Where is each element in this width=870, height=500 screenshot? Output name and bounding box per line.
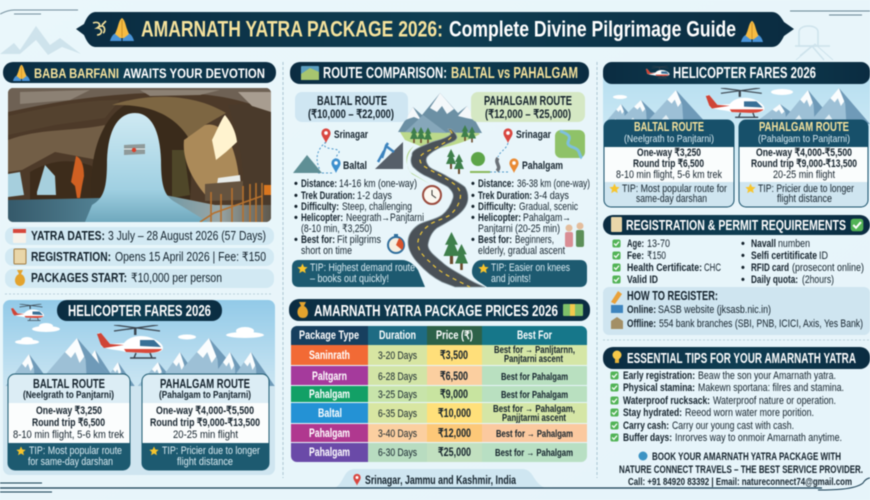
info: registration: REGISTRATION: <box>31 250 111 264</box>
list: baltal details: Distance: <box>301 178 337 190</box>
lingam <box>85 113 208 222</box>
panel: helicopter fares right <box>603 62 870 210</box>
list: baltal details: 14-16 km (one-way) <box>339 178 417 190</box>
icon: small helicopter <box>11 304 44 320</box>
info: registration: Opens 15 April 2026 | Fee: ₹150 <box>115 250 266 264</box>
card: baltal route: TIP: Most popular route <box>29 445 122 457</box>
list: requirements: numben <box>778 238 810 250</box>
icon: helicopter <box>706 88 764 117</box>
card: baltal: One-way ₹3,250 <box>637 147 701 159</box>
label: baltal route <box>295 92 408 122</box>
list: baltal details: • <box>294 212 298 224</box>
card: pahalgam route: flight distance <box>177 456 233 468</box>
list: baltal details: Steep, challenging <box>342 201 412 213</box>
list: baltal details: Fit pilgrims <box>337 234 381 246</box>
table text: 6-28 Days <box>378 371 417 383</box>
tip: baltal <box>292 260 425 287</box>
card: baltal route: for same-day darshan <box>28 456 113 468</box>
table text: Paltgarn <box>312 371 347 383</box>
list: requirements: • <box>741 274 745 286</box>
box: how to register: HOW TO REGISTER: <box>627 289 718 303</box>
tip: pahalgam: TIP: Easier on knees <box>491 262 570 274</box>
list: requirements: Age: <box>627 238 644 250</box>
list: tips: Physical stamina: <box>623 382 695 394</box>
heading: route comparison <box>290 62 589 84</box>
label: pahalgam route: PAHALGAM ROUTE <box>484 94 572 108</box>
icon: clock <box>423 186 441 204</box>
list: baltal details <box>294 178 424 257</box>
tip: baltal: – books out quickly! <box>310 273 389 285</box>
table text: Duration <box>379 330 416 342</box>
info: yatra dates <box>5 227 274 245</box>
list: baltal details: Helicopter: <box>301 212 343 224</box>
heading: package prices <box>289 299 590 321</box>
list: tips <box>610 370 844 444</box>
list: requirements: Navall <box>751 238 776 250</box>
list: pahalgam details: 3-4 days <box>534 190 569 202</box>
road <box>408 129 485 287</box>
icon: praying hands left <box>110 18 134 41</box>
list: baltal details: 1-2 days <box>357 190 392 202</box>
list: baltal details: • <box>294 201 298 213</box>
list: pahalgam details: • <box>471 234 475 246</box>
list: pahalgam details: Gradual, scenic <box>519 201 578 213</box>
list: pahalgam details: Pahalgam→ <box>523 212 571 224</box>
list: tips: Carry cash: <box>623 420 669 432</box>
card: baltal: Round trip ₹6,500 <box>633 158 704 170</box>
list: tips: Buffer days: <box>623 432 672 444</box>
table text <box>299 330 575 459</box>
icon: om <box>93 21 106 35</box>
icon: climber <box>375 142 403 169</box>
trees beside road <box>444 149 468 270</box>
panel: baba barfani <box>3 62 276 288</box>
list: requirements: • <box>741 250 745 262</box>
card: baltal: (Neelgrath to Panjtarni) <box>624 133 714 145</box>
list: baltal details: • <box>294 178 298 190</box>
list: pahalgam details: Best for: <box>478 234 512 246</box>
list: pahalgam details <box>471 178 590 257</box>
list: pahalgam details: Beginners, <box>515 234 554 246</box>
map: pahalgam: Srinagar <box>516 129 552 141</box>
heading: helicopter fares <box>57 300 222 321</box>
list: baltal details: Trek Duration: <box>301 190 355 202</box>
fence <box>200 183 262 222</box>
list: tips: Waterproof rucksack: <box>623 395 710 407</box>
tip: baltal: TIP: Highest demand route <box>310 262 415 274</box>
map: baltal: Baltal <box>343 160 367 172</box>
table text: 6-35 Days <box>378 408 417 420</box>
list: tips: Stay hydrated: <box>623 407 682 419</box>
table text: Best for → Pahalgam <box>495 447 573 459</box>
title banner <box>76 12 794 47</box>
list: requirements: CHC <box>704 262 721 274</box>
list: pahalgam details: Helicopter: <box>478 212 521 224</box>
list: baltal details: • <box>294 234 298 246</box>
list: pahalgam details: 36-38 km (one-way) <box>517 178 590 190</box>
table text: Pahalgam <box>309 428 350 440</box>
tip: pahalgam <box>472 260 587 287</box>
ice columns <box>8 165 56 197</box>
table text: ₹9,000 <box>440 387 468 401</box>
list: tips: Waterproof nature or operation. <box>713 395 836 407</box>
card: baltal route: BALTAL ROUTE <box>33 377 105 391</box>
map: pahalgam: Pahalgam <box>522 160 563 172</box>
list: requirements: • <box>741 238 745 250</box>
table text: Best for → Pahalgam, <box>493 403 575 415</box>
table text: 3-20 Days <box>378 350 417 362</box>
sky background <box>3 300 276 475</box>
card: pahalgam: flight distance <box>777 193 832 205</box>
box: how to register: Offline: <box>627 318 656 330</box>
list: requirements: 13-70 <box>647 238 670 250</box>
card: baltal: 8-10 min flight, 5-6 km trek <box>616 169 722 181</box>
table text: Panjtarni ascent <box>504 353 563 365</box>
list: requirements: Valid ID <box>627 274 658 286</box>
card: pahalgam route: (Pahalgam to Panjtarni) <box>159 390 251 401</box>
table text: ₹3,500 <box>440 348 468 362</box>
tip: pahalgam: and joints! <box>491 273 531 285</box>
heading: helicopter fares <box>603 62 870 84</box>
list: tips: Carry our young cast with cash. <box>672 420 794 432</box>
photo: ice lingam in cave <box>8 88 271 222</box>
table text: 3-40 Days <box>378 428 417 440</box>
table text: Best for Pahalgam <box>501 389 568 401</box>
label: pahalgam route: (₹12,000 – ₹25,000) <box>485 107 571 121</box>
list: requirements: • <box>741 262 745 274</box>
decoration: left mountain ornament <box>0 10 81 55</box>
location tab: Srinagar, Jammu and Kashmir, India <box>365 475 516 487</box>
list: baltal details: (8-10 min, ₹3,250) <box>301 223 372 235</box>
title white text: Complete Divine Pilgrimage Guide <box>449 16 736 42</box>
table text: Saninrath <box>309 350 350 362</box>
list: requirements: Fee: <box>627 250 644 262</box>
list: baltal details: • <box>294 190 298 202</box>
card: baltal route: 8-10 min flight, 5-6 km trek <box>13 429 124 441</box>
info: yatra dates: YATRA DATES: <box>31 229 105 243</box>
list: pahalgam details: Distance: <box>478 178 514 190</box>
heading: helicopter fares: HELICOPTER FARES 2026 <box>68 303 211 320</box>
mountains and road <box>398 93 485 287</box>
label: baltal route: (₹10,000 – ₹22,000) <box>308 107 394 121</box>
table text: Panjjtarmi ascent <box>502 412 566 424</box>
card: baltal route: Round trip ₹6,500 <box>32 417 105 429</box>
list: requirements: Daily quota: <box>751 274 798 286</box>
table text: Best For <box>517 330 552 342</box>
card: pahalgam route: 20-25 min flight <box>173 429 238 441</box>
table cell backgrounds <box>291 326 587 462</box>
info: packages start <box>5 269 274 288</box>
list: pahalgam details: • <box>471 201 475 213</box>
list: tips: Reeod worn water more porition. <box>685 407 814 419</box>
map: pahalgam <box>470 128 563 173</box>
label: baltal route: BALTAL ROUTE <box>317 94 387 108</box>
list: pahalgam details: • <box>471 178 475 190</box>
card: baltal: BALTAL ROUTE <box>634 120 704 134</box>
info: packages start: PACKAGES START: <box>31 271 127 285</box>
table text: 6-30 Days <box>378 447 417 459</box>
list: pahalgam details: • <box>471 212 475 224</box>
heading: package prices: AMARNATH YATRA PACKAGE PRICES 2026 <box>314 303 558 320</box>
map: baltal <box>293 128 403 173</box>
info: yatra dates: 3 July – 28 August 2026 (57 Days) <box>108 229 266 243</box>
table text: ₹12,000 <box>438 426 471 440</box>
info: registration <box>5 248 274 266</box>
heading: baba barfani <box>3 62 276 83</box>
list: baltal details: Neegrath→Panjtarni <box>346 212 424 224</box>
map: baltal: Srinagar <box>334 129 369 141</box>
sky scene <box>603 72 870 210</box>
card: pahalgam route <box>142 374 269 470</box>
icon: praying hands right <box>741 21 763 42</box>
card: pahalgam: (Pahalgam to Panjtarni) <box>758 133 850 145</box>
list: pahalgam details: Trek Duration: <box>478 190 532 202</box>
bottom rule <box>0 487 822 489</box>
card: pahalgam route: One-way ₹4,000-₹5,500 <box>156 405 254 417</box>
table text: Price (₹) <box>436 330 473 342</box>
stairs <box>205 181 243 201</box>
card: pahalgam route: PAHALGAM ROUTE <box>160 377 250 391</box>
table text: Pahalgam <box>309 447 350 459</box>
title gold text: AMARNATH YATRA PACKAGE 2026: <box>141 16 443 42</box>
card: baltal route <box>8 374 130 470</box>
list: pahalgam details: Difficulty: <box>478 201 516 213</box>
list: requirements: (2hours) <box>802 274 834 286</box>
table text: Best for Pahalgam <box>501 371 568 383</box>
orange figure <box>71 156 84 198</box>
card: baltal route: (Neelgrath to Panjtarni) <box>23 390 114 401</box>
list: pahalgam details: elderly, gradual ascent <box>478 245 565 257</box>
heading: essential tips <box>603 347 870 369</box>
list: tips: Early registration: <box>623 370 695 382</box>
callout: booking <box>619 451 863 488</box>
decoration: right temple ornament <box>790 11 870 60</box>
card: baltal: same-day darshan <box>636 193 707 205</box>
table text: ₹6,500 <box>440 369 468 383</box>
list: requirements <box>612 238 864 286</box>
table text: 3-25 Days <box>378 389 417 401</box>
list: pahalgam details: Panjtarni (20-25 min) <box>478 223 560 235</box>
icon: river valley <box>555 130 585 158</box>
list: baltal details: Difficulty: <box>301 201 339 213</box>
list: requirements: ₹150 <box>647 250 666 262</box>
list: tips: Beaw the son your Amarnath yatra. <box>698 370 836 382</box>
box: how to register: Online: <box>627 304 656 316</box>
list: baltal details: Best for: <box>301 234 335 246</box>
card: baltal: TIP: Most popular route for <box>622 183 727 195</box>
list: requirements: Selfi certitificate <box>751 250 817 262</box>
list: baltal details: short on time <box>301 245 352 257</box>
panel: registration <box>603 215 870 335</box>
info: packages start: ₹10,000 per person <box>131 271 222 285</box>
card: pahalgam: 20-25 min flight <box>773 169 835 181</box>
heading: route comparison: BALTAL vs PAHALGAM <box>451 65 578 82</box>
heading: baba barfani: AWAITS YOUR DEVOTION <box>123 66 265 81</box>
table text: ₹10,000 <box>438 406 471 420</box>
card: pahalgam <box>739 120 868 207</box>
panel: essential tips <box>603 347 870 488</box>
label: pahalgam route <box>471 92 585 122</box>
card: baltal route: One-way ₹3,250 <box>36 405 102 417</box>
list: requirements: ID <box>819 250 828 262</box>
location tab <box>335 469 545 488</box>
box: how to register: SASB website (jksasb.nic.in) <box>658 304 771 316</box>
table text: Baltal <box>318 408 342 420</box>
panel: package prices <box>289 299 590 488</box>
heading: helicopter fares: HELICOPTER FARES 2026 <box>673 65 816 82</box>
card: pahalgam route: TIP: Pricier due to longer <box>162 445 260 457</box>
icon: stopwatch <box>388 234 404 253</box>
card: baltal <box>604 120 734 207</box>
box: how to register <box>603 287 870 335</box>
table text: ₹25,000 <box>438 445 471 459</box>
icon: large helicopter <box>97 325 163 358</box>
table text: Best for → Panljtarnn, <box>494 344 575 356</box>
table text: Best for → Pahalgam <box>496 428 573 440</box>
panel: route comparison <box>290 62 590 287</box>
table text: Package Type <box>299 330 359 342</box>
panel: helicopter fares left <box>3 300 276 475</box>
heading: route comparison: ROUTE COMPARISON: <box>323 65 447 82</box>
card: pahalgam route: Round trip ₹9,000-₹13,500 <box>150 417 260 429</box>
heading: baba barfani: BABA BARFANI <box>34 66 119 81</box>
list: requirements: RFID card <box>751 262 789 274</box>
list: pahalgam details: • <box>471 190 475 202</box>
icon: elderly couple <box>565 222 584 247</box>
table text: Pahalgam <box>309 389 350 401</box>
list: requirements: Health Certificate: <box>627 262 702 274</box>
table: package prices <box>291 326 587 462</box>
